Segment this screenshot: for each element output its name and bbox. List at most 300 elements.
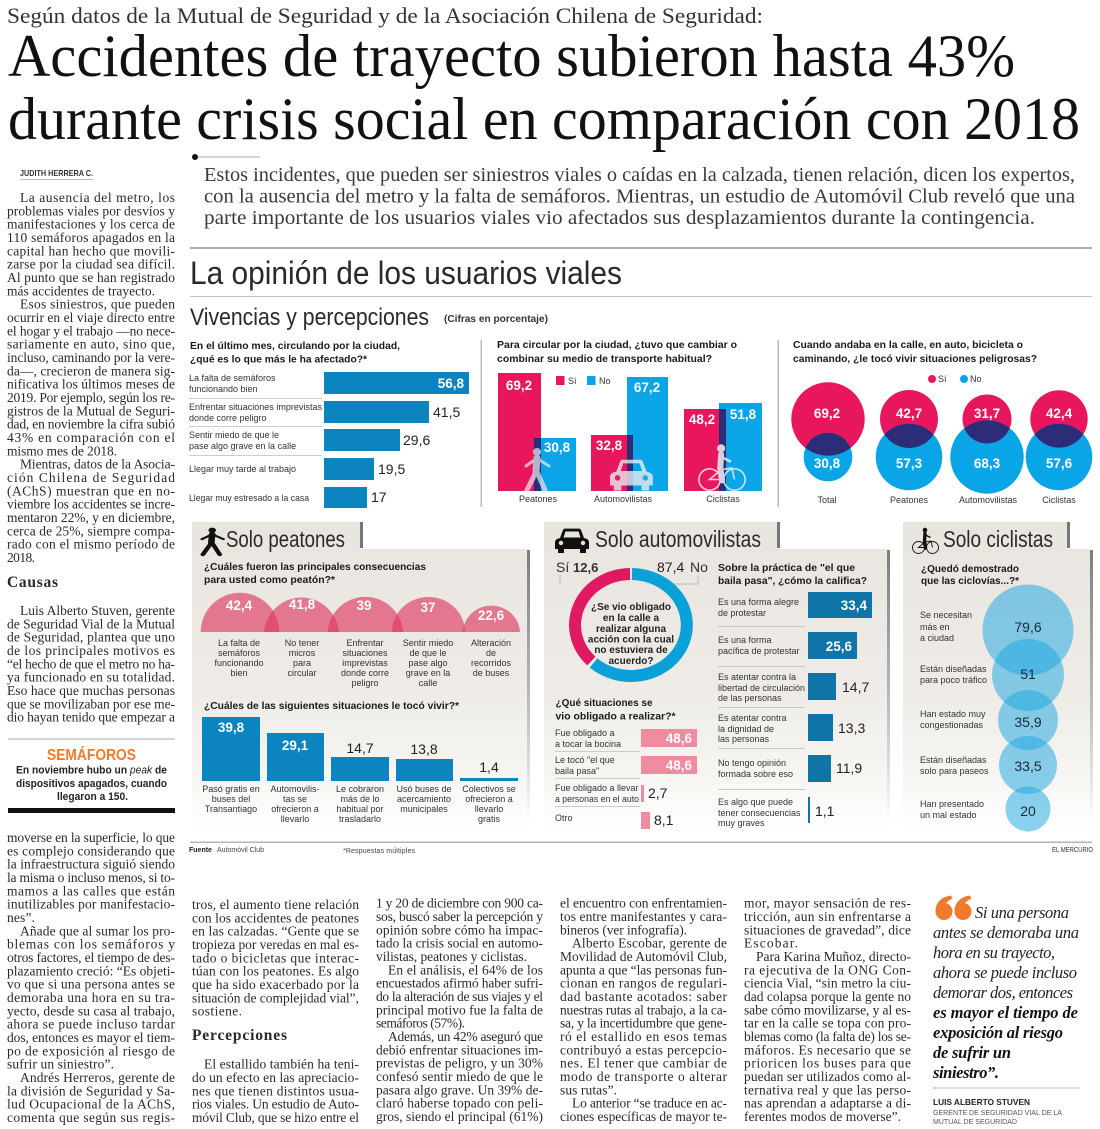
pull quote: hora en su trayecto, — [933, 943, 1055, 962]
legend — [556, 376, 611, 386]
panel: solo ciclistas: Solo ciclistas — [943, 526, 1053, 552]
panel: column one body text: incluso, caminando por la vere- — [7, 350, 176, 365]
chart: consequences semicircles: peligro — [351, 678, 379, 688]
chart: dangerous situations circles — [791, 339, 1092, 505]
panel: column one body text: “el hecho de que el metro no ha- — [7, 656, 176, 671]
panel: column one continued: Añade que al sumar los pro- — [20, 923, 176, 938]
chart: donut: 12,6 — [573, 560, 598, 575]
source note: *Respuestas múltiples — [343, 848, 416, 855]
chart: dangerous situations circles: Peatones — [890, 495, 929, 505]
panel: column four body text: contribuyó a estas percepcio- — [560, 1042, 728, 1057]
chart: most affected bar chart: Llegar muy tarde al trabajo — [189, 464, 296, 474]
panel: column three body text: principal motivo fue la falta de — [376, 1002, 543, 1017]
chart: consequences semicircles: Sentir miedo — [403, 638, 453, 648]
chart: change of transport bars — [497, 339, 762, 504]
chart: bike lane bubbles: 51 — [1020, 666, 1036, 682]
chart: situations column bars: 29,1 — [282, 738, 309, 753]
icon: car black — [555, 529, 589, 553]
chart: donut: acuerdo? — [608, 656, 654, 667]
callout: semaforos — [8, 738, 175, 813]
chart: donut: ¿Se vio obligado — [591, 602, 671, 613]
panel: solo ciclistas: ¿Quedó demostrado — [921, 563, 1019, 575]
chart: obliged actions bars — [555, 728, 697, 829]
panel: column five body text: tricción, aun sin enfrentarse a — [744, 909, 911, 924]
panel: column three body text: do la alteración de sus viajes y el — [376, 989, 543, 1004]
chart: change of transport bars: combinar su medio de transporte habitual? — [497, 353, 712, 365]
panel: column five body text: sabe cómo movilizarse, y al es- — [744, 1002, 912, 1017]
chart: dangerous situations circles: 68,3 — [974, 456, 1001, 471]
chart: situations column bars: trasladarlo — [339, 814, 381, 824]
chart: obliged actions bars: Fue obligado a llevar — [555, 783, 639, 793]
panel: column two body text: nes que tienen distintos usua- — [192, 1083, 360, 1098]
chart: situations column bars — [202, 717, 518, 824]
chart: dangerous situations circles: Automovilistas — [959, 495, 1018, 505]
chart: consequences semicircles: de que le — [409, 648, 447, 658]
panel: column one body text: La ausencia del metro, los — [20, 190, 175, 205]
chart: most affected bar chart: 19,5 — [378, 461, 405, 477]
chart: el que baila pasa bars: de las personas — [718, 693, 782, 703]
chart: change of transport bars: Automovilistas — [594, 494, 653, 504]
chart: situations column bars: 14,7 — [346, 740, 374, 756]
chart: most affected bar chart: donde corre peligro — [189, 413, 267, 423]
chart: el que baila pasa bars: pacífica de protestar — [718, 646, 800, 656]
panel: column one body text — [7, 190, 176, 725]
panel: column five body text: ferentes modos de moverse”. — [744, 1109, 901, 1124]
chart: consequences semicircles: micros — [289, 648, 316, 658]
chart: consequences semicircles: calle — [419, 678, 437, 688]
panel: solo peatones: para usted como peatón?* — [204, 574, 336, 586]
panel: column one body text: mentaron 22%, y en diciembre, — [7, 510, 175, 525]
chart: most affected bar chart: ¿qué es lo que más le ha afectado?* — [190, 354, 368, 366]
panel: column one body text: manifestaciones y los cerca de — [7, 217, 175, 232]
chart: bike lane bubbles: Se necesitan — [920, 610, 972, 620]
panel: column one continued: sufrir un siniestro”. — [7, 1057, 114, 1072]
panel: column two body text: con los accidentes de peatones — [192, 910, 359, 925]
chart: el que baila pasa bars: No tengo opinión — [718, 758, 786, 768]
chart: dangerous situations circles: 42,7 — [896, 406, 922, 421]
panel: column three body text: debió enfrentar situaciones im- — [376, 1042, 544, 1057]
chart: situations column bars: municipales — [400, 804, 448, 814]
panel: column two body text: tros, el aumento tiene relación — [192, 897, 359, 912]
panel: column two body text: que ha sido exacerbado por la — [192, 977, 359, 992]
panel: solo peatones: ¿Cuáles de las siguientes situaciones le tocó vivir?* — [204, 700, 460, 712]
panel: column four body text: Movilidad de Automóvil Club, — [560, 949, 727, 964]
panel: column two body text: tado o bicicletas que interac- — [192, 950, 360, 965]
panel: column three body text: sos, buscó saber la percepción y — [376, 909, 543, 924]
panel: column one body text: Causas — [7, 574, 58, 591]
deck marker — [192, 154, 260, 160]
chart: dangerous situations circles: 30,8 — [814, 456, 841, 471]
chart: consequences semicircles: funcionando — [214, 658, 264, 668]
chart: situations column bars: Le cobraron — [336, 784, 384, 794]
subheading: Vivencias y percepciones — [190, 304, 429, 331]
pull quote: MUTUAL DE SEGURIDAD — [933, 1117, 1018, 1126]
panel: column one body text: 2019. Por ejemplo, según los re- — [7, 390, 176, 405]
chart: el que baila pasa bars: 33,4 — [841, 598, 867, 613]
chart: el que baila pasa bars: 14,7 — [842, 679, 869, 695]
panel: column one body text: Mientras, datos de la Asocia- — [20, 457, 176, 472]
chart: situations column bars: buses del — [212, 794, 250, 804]
legend: No — [970, 374, 982, 384]
panel: column one body text: de los principales motivos es — [7, 643, 175, 658]
chart: obliged actions bars: 48,6 — [666, 731, 692, 746]
chart: bike lane bubbles: a ciudad — [920, 633, 954, 643]
chart: bike lane bubbles: más en — [920, 622, 950, 632]
title — [8, 23, 1080, 152]
pull quote: demorar dos, entonces — [933, 983, 1073, 1002]
chart: most affected bar chart: 56,8 — [438, 376, 464, 391]
panel: solo automovilistas: vio obligado a realizar?* — [556, 710, 676, 722]
chart: obliged actions bars: 48,6 — [666, 758, 692, 773]
chart: most affected bar chart: 29,6 — [403, 432, 430, 448]
panel: column one body text: rado con el mismo período de — [7, 537, 175, 552]
panel: solo peatones: ¿Cuáles fueron las principales consecuencias — [204, 561, 426, 573]
chart: el que baila pasa bars: la dignidad de — [718, 724, 774, 734]
chart: most affected bar chart: En el último mes, circulando por la ciudad, — [190, 340, 400, 352]
panel: column four body text: Lo anterior “se traduce en ac- — [572, 1096, 728, 1111]
panel: solo peatones — [192, 522, 530, 838]
chart: bike lane bubbles: 35,9 — [1014, 714, 1042, 730]
panel: column one continued: Andrés Herreros, gerente de — [20, 1070, 175, 1085]
chart: change of transport bars: Ciclistas — [706, 494, 740, 504]
title: Accidentes de trayecto subieron hasta 43% — [8, 23, 1015, 89]
chart: donut: Sí — [556, 559, 569, 575]
pull quote: antes se demoraba una — [933, 923, 1079, 942]
panel: column four body text: nes. El tener que cambiar de — [560, 1056, 727, 1071]
panel: column four body text: ciones específicas de mayor te- — [560, 1109, 728, 1124]
panel: column four body text — [560, 896, 728, 1124]
legend: Sí — [568, 376, 577, 386]
source note — [189, 847, 1093, 855]
chart: obliged actions bars: 2,7 — [648, 785, 668, 801]
panel: column one continued: comenta que según sus regis- — [7, 1110, 176, 1125]
chart: most affected bar chart: funcionando bien — [189, 384, 258, 394]
chart: obliged actions bars: a personas en el auto — [555, 794, 639, 804]
panel: column one continued: lud Ocupacional de la AChS, — [7, 1097, 175, 1112]
panel: column one continued: plazamiento creció: “Es objeti- — [7, 963, 176, 978]
panel: column one continued: nes”. — [7, 910, 35, 925]
pull quote: ahora se puede incluso — [933, 963, 1077, 982]
pull quote: exposición al riesgo — [933, 1023, 1063, 1042]
panel: column four body text: sa, y la incertidumbre que gene- — [560, 1016, 728, 1031]
panel: column two body text: túan con los peatones. Es algo — [192, 964, 359, 979]
panel: column one body text: capital han hecho que movili- — [7, 243, 176, 258]
chart: situations column bars: 1,4 — [479, 759, 499, 775]
panel: column five body text: prioricen los buses para que — [744, 1056, 911, 1071]
chart: change of transport bars: 67,2 — [634, 380, 660, 395]
deck text — [204, 165, 1075, 229]
panel: column four body text: dad bastante acotados: saber — [560, 989, 728, 1004]
chart: consequences semicircles: donde corre — [341, 668, 389, 678]
subheading: (Cifras en porcentaje) — [444, 314, 548, 325]
chart: situations column bars: llevarlo — [475, 804, 503, 814]
panel: column one continued: es complejo considerando que — [7, 843, 175, 858]
title: durante crisis social en comparación con 2018 — [8, 86, 1080, 152]
panel: column one body text: Luis Alberto Stuven, gerente — [20, 603, 175, 618]
chart: most affected bar chart: 41,5 — [433, 404, 460, 420]
chart: change of transport bars: 48,2 — [689, 412, 715, 427]
panel: column one body text: que se movilizaban por ese me- — [7, 696, 176, 711]
chart: consequences semicircles: No tener — [285, 638, 319, 648]
panel: column one body text: dio hayan tenido que empezar a — [7, 710, 175, 725]
panel: column four body text: ró el estallido en esos temas — [560, 1029, 727, 1044]
panel: column one body text: da—, crecieron de manera sig- — [7, 363, 176, 378]
chart: situations column bars: Transantiago — [205, 804, 257, 814]
panel: column five body text: mor, mayor sensación de res- — [744, 896, 912, 911]
chart: bike lane bubbles: Han presentado — [920, 799, 984, 809]
panel: solo automovilistas: baila pasa", ¿cómo la califica? — [718, 575, 867, 587]
chart: el que baila pasa bars: Es atentar contra la — [718, 672, 796, 682]
panel: column one body text: 43% en comparación con el — [7, 430, 175, 445]
panel: column four body text: Alberto Escobar, gerente de — [572, 936, 727, 951]
panel: column two body text: móvil Club, que se hizo entre el — [192, 1110, 359, 1125]
panel: column three body text: semáforos (57%). — [376, 1016, 465, 1031]
chart: situations column bars: más de lo — [340, 794, 380, 804]
chart: situations column bars: ofrecieron a — [465, 794, 513, 804]
panel: column five body text: situaciones de gravedad”, dice — [744, 922, 911, 937]
chart: situations column bars: habitual por — [336, 804, 384, 814]
byline: JUDITH HERRERA C. — [20, 168, 93, 178]
chart: consequences semicircles: 37 — [420, 600, 436, 615]
chart: donut: acción con la cual — [588, 634, 674, 646]
panel: column four body text: bineros (ver infografía). — [560, 922, 687, 937]
deck text: parte importante de los usuarios viales vio afectados sus desplazamientos durante la contingencia. — [204, 208, 1035, 229]
panel: column one continued: otros factores, el tiempo de des- — [7, 950, 176, 965]
chart: situations column bars: llevarlo — [281, 814, 309, 824]
panel: column three body text: tado la crisis social en automo- — [376, 936, 544, 951]
panel: column one continued: la infraestructura siguió siendo — [7, 857, 175, 872]
chart: el que baila pasa bars: Es una forma alegre — [718, 597, 799, 607]
chart: dangerous situations circles: caminando, ¿le tocó vivir situaciones peligrosas? — [793, 353, 1037, 365]
pull quote: GERENTE DE SEGURIDAD VIAL DE LA — [933, 1108, 1062, 1117]
panel: column three body text: pasara algo grave. Un 39% de- — [376, 1082, 544, 1097]
chart: situations column bars: Colectivos se — [462, 784, 516, 794]
chart: consequences semicircles: semáforos — [218, 648, 261, 658]
callout: semaforos: llegaron a 150. — [57, 791, 128, 803]
chart: most affected bar chart: pase algo grave en la calle — [189, 441, 296, 451]
panel: column two body text: rios viales. Un estudio de Auto- — [192, 1097, 360, 1112]
panel: column two body text: do un efecto en las apreciacio- — [192, 1070, 360, 1085]
chart: consequences semicircles: La falta de — [218, 638, 260, 648]
chart: bike lane bubbles: 79,6 — [1014, 619, 1042, 635]
panel: column one body text: 110 semáforos apagados en la — [7, 230, 175, 245]
panel: column two body text: Percepciones — [192, 1027, 287, 1044]
chart: change of transport bars: Para circular por la ciudad, ¿tuvo que cambiar o — [497, 339, 737, 351]
panel: solo ciclistas: que las ciclovías...?* — [921, 575, 1020, 587]
chart: bike lane bubbles — [920, 584, 1074, 832]
panel: column one body text: (AChS) muestran que en no- — [7, 483, 176, 498]
icon: car — [610, 460, 653, 490]
callout: semaforos: En noviembre hubo un peak de — [16, 764, 167, 776]
chart: situations column bars: tas se — [283, 794, 307, 804]
chart: obliged actions bars: a tocar la bocina — [555, 739, 621, 749]
chart: el que baila pasa bars: las personas — [718, 734, 770, 744]
chart: change of transport bars: 32,8 — [596, 438, 623, 453]
deck text: con la ausencia del metro y la falta de semáforos. Mientras, un estudio de Automóvil Club reveló que una — [204, 186, 1075, 208]
chart: consequences semicircles: situaciones — [342, 648, 388, 658]
chart: change of transport bars: 69,2 — [506, 378, 532, 393]
panel: column one body text: el hogar y el trabajo —no nece- — [7, 323, 176, 338]
panel: column one body text: Eso hace que muchas personas — [7, 683, 175, 698]
chart: most affected bar chart: 17 — [371, 489, 387, 505]
chart: situations column bars: acercamiento — [397, 794, 451, 804]
chart: bike lane bubbles: Están diseñadas — [920, 755, 987, 765]
panel: column one body text: nificativa los últimos meses de — [7, 377, 175, 392]
chart: el que baila pasa bars: 1,1 — [815, 803, 835, 819]
panel: column five body text: ternativa real y que las perso- — [744, 1082, 912, 1097]
chart: dangerous situations circles: Total — [817, 495, 837, 505]
panel: column two body text — [192, 897, 360, 1125]
chart: bike lane bubbles: un mal estado — [920, 810, 977, 820]
chart: consequences semicircles: 39 — [356, 598, 372, 613]
chart: el que baila pasa bars: 11,9 — [836, 760, 862, 776]
panel: column three body text: opinión sobre cómo ha impac- — [376, 922, 544, 937]
pull quote — [932, 896, 1080, 1126]
panel: column five body text: ra ejecutiva de la ONG Con- — [744, 962, 912, 977]
panel: column one body text: problemas viales por desvíos y — [7, 203, 175, 218]
legend: Sí — [938, 374, 947, 384]
chart: obliged actions bars: baila pasa" — [555, 766, 599, 776]
legend: No — [599, 376, 611, 386]
chart: bike lane bubbles: Están diseñadas — [920, 664, 987, 674]
chart: consequences semicircles: de buses — [473, 668, 510, 678]
panel: column one continued: ahora se puede incluso tardar — [7, 1017, 176, 1032]
chart: el que baila pasa bars: tener consecuencias — [718, 808, 801, 818]
chart: consequences semicircles: recorridos — [471, 658, 512, 668]
chart: el que baila pasa bars: formada sobre eso — [718, 769, 793, 779]
icon: pedestrian — [526, 448, 549, 490]
chart: consequences semicircles: grave en la — [406, 668, 450, 678]
chart: dangerous situations circles: Ciclistas — [1042, 495, 1076, 505]
panel: column five body text: blemas como (la falta de) los se- — [744, 1029, 912, 1044]
chart: situations column bars: Usó buses de — [396, 784, 452, 794]
panel: column five body text: puedan ser utilizados como al- — [744, 1069, 912, 1084]
pull quote: Si una persona — [975, 903, 1069, 922]
panel: column four body text: nuestras rutas al trabajo, a la ca- — [560, 1002, 728, 1017]
panel: column two body text: tropieza por veredas en mal es- — [192, 937, 360, 952]
chart: bike lane bubbles: 33,5 — [1014, 758, 1042, 774]
panel: column three body text: confesó sentir miedo de que le — [376, 1069, 543, 1084]
kicker: Según datos de la Mutual de Seguridad y de la Asociación Chilena de Seguridad: — [7, 3, 763, 28]
panel: column three body text: vilistas, peatones y ciclistas. — [376, 949, 527, 964]
panel: column one body text: dad, en noviembre la cifra subió — [7, 417, 175, 432]
chart: donut: realizar alguna — [596, 624, 666, 635]
chart: bike lane bubbles: solo para paseos — [920, 766, 989, 776]
chart: situations column bars: Automovilis- — [270, 784, 320, 794]
chart: dangerous situations circles: 57,3 — [896, 456, 923, 471]
icon: pedestrian black — [202, 528, 224, 555]
chart: donut: No — [690, 559, 708, 575]
chart: most affected bar chart: La falta de semáforos — [189, 373, 276, 383]
pull quote: LUIS ALBERTO STUVEN — [933, 1097, 1030, 1107]
chart: bike lane bubbles: Han estado muy — [920, 709, 986, 719]
chart: obliged actions bars: Otro — [555, 813, 573, 823]
icon: cyclist black — [912, 528, 938, 554]
panel: column one body text: gistros de la Mutual de Seguri- — [7, 403, 176, 418]
chart: most affected bar chart: Sentir miedo de que le — [189, 430, 279, 440]
panel: column two body text: situación de complejidad vial”, — [192, 990, 359, 1005]
chart: consequences semicircles: circular — [287, 668, 317, 678]
panel: column five body text: Para Karina Muñoz, directo- — [756, 949, 912, 964]
panel: column four body text: cionan en rangos de regulari- — [560, 976, 728, 991]
chart: donut: 87,4 — [657, 559, 684, 575]
panel: column four body text: el encuentro con enfrentamien- — [560, 896, 728, 911]
callout: semaforos: dispositivos apagados, cuando — [16, 778, 167, 790]
source note: Fuente — [189, 847, 212, 854]
deck text: Estos incidentes, que pueden ser siniestros viales o caídas en la calzada, tienen relación, dicen los expertos, — [204, 165, 1075, 186]
panel: column one body text: de Seguridad, plantea que uno — [7, 630, 175, 645]
panel: column three body text: Además, un 42% aseguró que — [388, 1029, 543, 1044]
panel: column one body text: sariamente en auto, sino que, — [7, 337, 175, 352]
chart: situations column bars: ofrecieron a — [271, 804, 319, 814]
panel: column one continued — [7, 830, 176, 1125]
panel: column five body text: tar en la calle se topa con pro- — [744, 1016, 912, 1031]
panel: column three body text: 1 y 20 de diciembre con 900 ca- — [376, 896, 544, 911]
panel: solo automovilistas: ¿Qué situaciones se — [556, 697, 653, 709]
panel: column two body text: sostiene. — [192, 1004, 242, 1019]
chart: most affected bar chart: Llegar muy estresado a la casa — [189, 493, 309, 503]
chart: dangerous situations circles: 31,7 — [974, 406, 1000, 421]
panel: column one body text: ya funcionado en su totalidad. — [7, 670, 175, 685]
source note: EL MERCURIO — [1052, 847, 1093, 854]
panel: column one continued: blemas con los semáforos y — [7, 937, 175, 952]
chart: donut: en la calle a — [603, 613, 660, 624]
chart: donut: no estuviera de — [594, 645, 668, 656]
panel: column two body text: en las calzadas. “Gente que se — [192, 924, 359, 939]
chart: bike lane bubbles: para poco tráfico — [920, 675, 987, 685]
panel: column one continued: inutilizables por manifestacio- — [7, 897, 176, 912]
chart: el que baila pasa bars: muy graves — [718, 818, 765, 828]
panel: column three body text — [376, 896, 544, 1124]
chart: most affected bar chart — [189, 340, 469, 508]
chart: consequences semicircles: para — [293, 658, 311, 668]
chart: bike lane bubbles: congestionadas — [920, 720, 984, 730]
icon: cyclist — [699, 444, 745, 490]
panel: column four body text: sus rutas”. — [560, 1082, 617, 1097]
chart: situations column bars: 39,8 — [218, 720, 245, 735]
panel: column one body text: ción Chilena de Seguridad — [7, 470, 175, 485]
chart: el que baila pasa bars: Es atentar contra — [718, 713, 787, 723]
panel: column two body text: El estallido también ha teni- — [204, 1057, 360, 1072]
panel: column five body text: dad colapsa porque la gente no — [744, 989, 911, 1004]
panel: column four body text: tos entre manifestantes y cara- — [560, 909, 728, 924]
panel: column one body text: viembre los accidentes se incre- — [7, 497, 176, 512]
panel: column one continued: la misma o incluso menos, si to- — [7, 870, 176, 885]
chart: consequences semicircles: bien — [230, 668, 248, 678]
chart: bike lane bubbles: 20 — [1020, 803, 1036, 819]
pull quote: es mayor el tiempo de — [933, 1003, 1078, 1022]
chart: dangerous situations circles: 69,2 — [814, 406, 840, 421]
callout: semaforos: SEMÁFOROS — [47, 745, 136, 764]
chart: dangerous situations circles: Cuando andaba en la calle, en auto, bicicleta o — [793, 339, 1023, 351]
panel: column one body text: ocurrir en el viaje directo entre — [7, 310, 175, 325]
chart: obliged actions bars: Le tocó "el que — [555, 755, 615, 765]
chart: change of transport bars: 30,8 — [544, 440, 571, 455]
panel: column one body text: cerca de 25%, siempre compa- — [7, 523, 176, 538]
panel: column one continued: yecto, desde su casa al trabajo, — [7, 1003, 175, 1018]
panel: column three body text: En el análisis, el 64% de los — [388, 962, 543, 977]
chart: consequences semicircles — [201, 593, 520, 688]
chart: dangerous situations circles: 42,4 — [1046, 406, 1073, 421]
chart: consequences semicircles: Enfrentar — [346, 638, 384, 648]
panel: column three body text: claró haberse topado con peli- — [376, 1096, 544, 1111]
panel: column one body text: mismo mes de 2018. — [7, 443, 117, 458]
panel: solo ciclistas — [903, 522, 1093, 838]
pull quote: siniestro”. — [932, 1063, 999, 1082]
chart: el que baila pasa bars: 13,3 — [838, 720, 865, 736]
chart: el que baila pasa bars: Es una forma — [718, 635, 772, 645]
panel: column one body text: de Seguridad Vial de la Mutual — [7, 616, 175, 631]
